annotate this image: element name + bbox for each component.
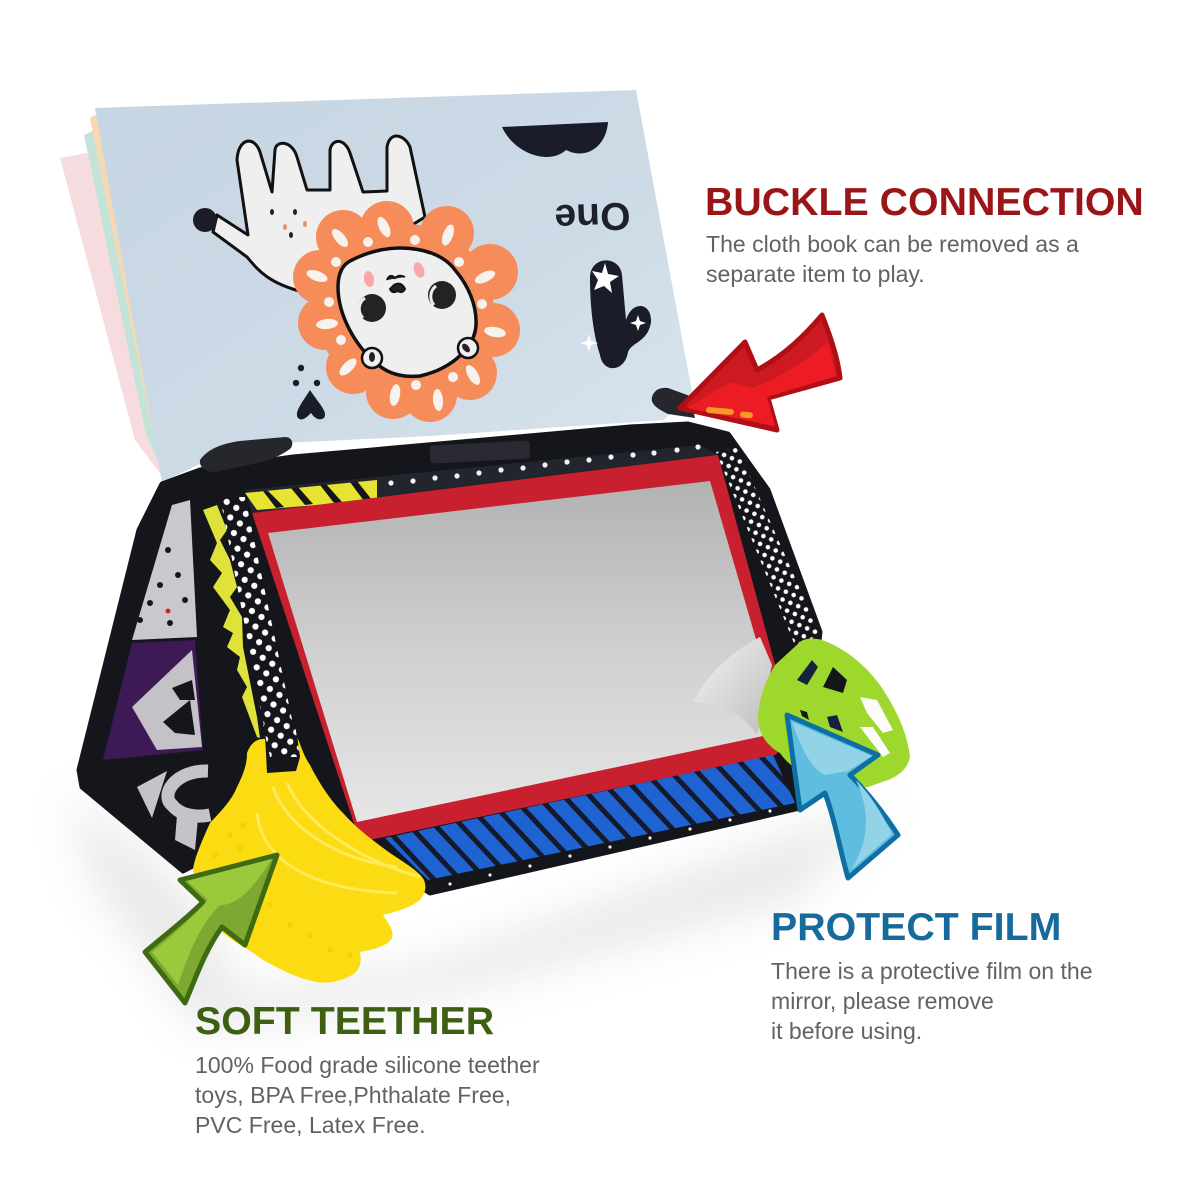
- icon: green leaf teether: [758, 639, 910, 787]
- icon: black cactus: [580, 260, 651, 368]
- text: protect film description: [771, 958, 1093, 1044]
- red border: [252, 455, 795, 842]
- text: soft teether description: PVC Free, Latex Free.: [195, 1112, 426, 1138]
- icon: yellow banana teether: [193, 725, 425, 983]
- arrow: red: [680, 315, 840, 430]
- text: soft teether description: [195, 1052, 540, 1138]
- dots top: [388, 444, 701, 486]
- film peel: [693, 637, 772, 735]
- ribbon through teether hole: [265, 735, 300, 773]
- text: protect film description: There is a protective film on the: [771, 958, 1093, 984]
- soft shadow under toy: [70, 790, 890, 1030]
- text: buckle connection description: [706, 231, 1079, 287]
- book label: One (upside down): One: [554, 194, 631, 239]
- text: buckle connection description: The cloth book can be removed as a: [706, 231, 1079, 257]
- heading: buckle connection: BUCKLE CONNECTION: [705, 180, 1144, 224]
- top band: [245, 445, 718, 513]
- small stars on bottom band: [448, 809, 772, 886]
- text: protect film description: mirror, please remove: [771, 988, 994, 1014]
- yellow strip: [245, 480, 377, 510]
- top strap: [430, 440, 530, 464]
- icon: hand: [213, 136, 425, 292]
- mirror: [268, 481, 778, 822]
- text: protect film description: it before using.: [771, 1018, 922, 1044]
- buckles: [200, 388, 695, 472]
- text: soft teether description: 100% Food grade silicone teether: [195, 1052, 540, 1078]
- ribbon left: [220, 497, 300, 757]
- cloth book cover: [95, 90, 692, 482]
- heading: protect film: PROTECT FILM: [771, 905, 1061, 949]
- side panel artwork: [103, 500, 210, 850]
- arrow: green: [145, 855, 277, 1003]
- yellow zigzag strip: [203, 505, 260, 738]
- mirror front: [203, 440, 820, 886]
- icon: black shape top right: [502, 122, 608, 157]
- back pages of book: [60, 112, 165, 480]
- text: soft teether description: toys, BPA Free,Phthalate Free,: [195, 1082, 511, 1108]
- heading: soft teether: SOFT TEETHER: [195, 999, 494, 1043]
- blue stripe: [385, 755, 795, 880]
- text: buckle connection description: separate item to play.: [706, 261, 925, 287]
- icon: small heart with dots: [293, 365, 325, 419]
- icon: lion face with orange mane: [293, 201, 520, 422]
- arrow: blue: [787, 715, 898, 878]
- ribbon right: [716, 447, 820, 648]
- mirror stand silhouette: [79, 424, 820, 893]
